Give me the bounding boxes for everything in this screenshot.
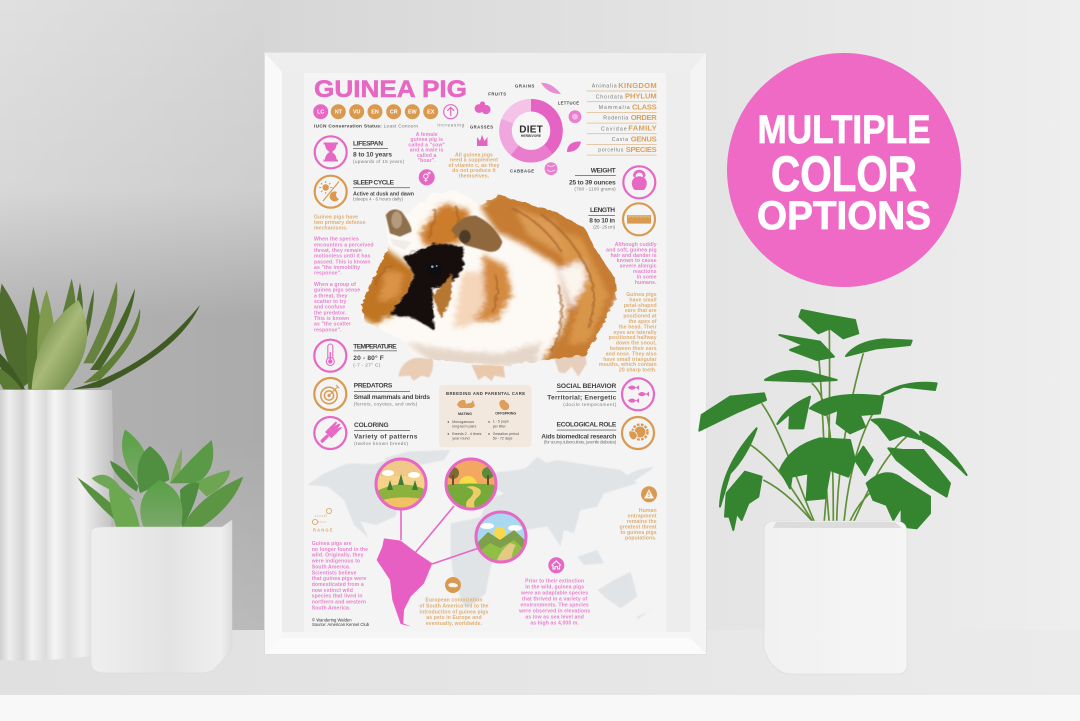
population trend: Increasing	[437, 123, 465, 129]
allergy text: in some	[637, 274, 657, 280]
callout: multiple color options: COLOR	[771, 146, 917, 202]
conservation status badges: LC	[317, 110, 324, 116]
length	[588, 203, 655, 235]
social behavior: (docile temperament)	[563, 402, 617, 407]
conservation status text: IUCN Conservation Status: Least Concern	[314, 123, 418, 129]
breeding panel: Monogamous	[452, 420, 474, 424]
social behavior	[547, 378, 654, 410]
callout: multiple color options	[727, 53, 961, 287]
sleep cycle: SLEEP CYCLE	[353, 180, 395, 187]
feet	[398, 351, 587, 381]
icon: home	[548, 557, 564, 573]
gender note: ⚥	[422, 172, 431, 184]
gender note: guinea pig is	[410, 137, 443, 143]
breeding panel: MATING	[458, 412, 472, 416]
taxonomy table: ORDER	[631, 113, 657, 122]
gender note: A female	[416, 132, 438, 138]
anatomy text: petal-shaped	[624, 303, 657, 309]
extinction text: that thrived in a variety of	[522, 597, 588, 603]
conservation status badges: EN	[371, 110, 379, 116]
taxonomy table: CLASS	[632, 102, 657, 111]
predators: (ferrets, coyotes, and owls)	[354, 402, 418, 407]
temperature: (-7 - 27° C)	[353, 362, 381, 367]
credits: © Wandering Walden	[312, 617, 352, 622]
allergy text: severe allergic	[619, 264, 657, 270]
gender note: and a male is	[410, 148, 444, 154]
icon: lettuce	[569, 110, 581, 123]
breeding panel: BREEDING AND PARENTAL CARE	[446, 391, 525, 396]
anatomy text: between their ears	[610, 346, 657, 352]
lifespan: (upwards of 15 years)	[353, 159, 404, 164]
range text: northern and western	[312, 600, 366, 606]
taxonomy table: FAMILY	[628, 124, 657, 133]
icon: warning	[641, 486, 657, 502]
conservation status badges: VU	[353, 110, 361, 116]
diet labels: CABBAGE	[510, 169, 534, 174]
habitat scene: forest hills	[375, 458, 427, 510]
weight: WEIGHT	[591, 167, 616, 174]
defense text: guinea pigs sense	[314, 288, 360, 294]
taxonomy table: GENUS	[631, 134, 657, 143]
ecological role	[541, 417, 654, 449]
defense text: response".	[314, 271, 342, 277]
square white pot	[764, 521, 907, 674]
icon: offspring	[499, 400, 509, 410]
range text: no longer found in the	[312, 547, 368, 553]
credits: Source: American Kennel Club	[312, 622, 370, 627]
taxonomy table: Rodentia	[603, 116, 628, 122]
square pot with succulent	[77, 429, 243, 673]
threat text: remains the	[627, 519, 657, 525]
social behavior: Territorial; Energetic	[547, 394, 617, 401]
breeding panel: per litter	[493, 424, 506, 428]
length: (25 - 25 cm)	[593, 224, 615, 229]
taxonomy table: KINGDOM	[618, 81, 657, 90]
diet labels: LETTUCE	[558, 100, 579, 105]
length: LENGTH	[590, 207, 615, 214]
range text: species that lived in	[312, 594, 363, 600]
extinction text: as high as 4,000 m.	[530, 621, 580, 627]
allergy text: hair and dander is	[611, 253, 657, 259]
range legend	[312, 508, 333, 533]
taxonomy table: Cavidae	[601, 126, 627, 132]
diet donut chart	[499, 99, 563, 162]
ecological role: Aids biomedical research	[541, 434, 616, 441]
conservation status badges	[313, 104, 458, 119]
sleep cycle: Active at dusk and dawn	[353, 191, 414, 197]
taxonomy table: SPECIES	[626, 145, 657, 154]
extinction text: environments. The species	[520, 603, 589, 609]
taxonomy table: porcellus	[598, 148, 624, 154]
conservation status badges: CR	[390, 110, 398, 116]
range text: South America.	[312, 564, 351, 570]
defense text: as "the immobility	[314, 265, 360, 271]
taxonomy table	[587, 81, 657, 156]
temperature: TEMPERATURE	[353, 343, 397, 350]
colonization text: European colonization	[425, 598, 483, 604]
defense text: motionless until it has	[314, 254, 371, 260]
conservation status badges: EW	[408, 110, 418, 116]
diet labels	[470, 83, 579, 174]
diet labels: GRAINS	[515, 83, 535, 88]
diet donut chart: DIET	[519, 125, 543, 136]
threat text: populations.	[625, 536, 657, 542]
map connector lines	[401, 506, 479, 564]
vitamin note: need a supplement	[450, 158, 498, 164]
lifespan: 8 to 10 years	[353, 152, 392, 159]
allergy text: humans.	[635, 280, 657, 286]
threat text: greatest threat	[620, 524, 657, 530]
social behavior: SOCIAL BEHAVIOR	[557, 383, 617, 390]
extinction text: Prior to their extinction	[525, 579, 584, 585]
defense text: When the species	[314, 237, 359, 243]
callout: multiple color options: MULTIPLE	[758, 108, 930, 152]
allergy text: reactions	[633, 269, 657, 275]
colonization text: as pets in Europe and	[426, 615, 482, 621]
range text: Guinea pigs are	[312, 541, 352, 547]
anatomy text: 20 sharp teeth.	[619, 368, 657, 374]
taxonomy table: Mammalia	[599, 105, 630, 111]
range text: wild. Originally, they	[311, 553, 364, 559]
breeding panel: year round	[452, 437, 469, 441]
anatomy text: positioned at	[623, 314, 657, 320]
vitamin note: All guinea pigs	[455, 152, 493, 158]
defense text: encounters a perceived	[314, 242, 374, 248]
breeding panel: Breeds 2 - 4 times	[452, 432, 482, 436]
defense text: This is known	[314, 316, 349, 322]
diet labels: GRASSES	[470, 125, 493, 130]
defense text: a threat, they	[314, 293, 347, 299]
habitat scene: winding path	[445, 458, 497, 512]
icon: grains	[541, 83, 561, 94]
defense text: passed. This is known	[314, 259, 371, 265]
threat text: to guinea pigs	[620, 530, 657, 536]
taxonomy table: PHYLUM	[625, 92, 657, 101]
gender note	[408, 132, 445, 185]
coloring: (twelve known breeds)	[354, 441, 408, 446]
icon: colonization	[445, 577, 461, 593]
diet labels: FRUITS	[488, 92, 506, 97]
breeding panel	[439, 385, 532, 447]
tall fluted vase with plant	[0, 278, 200, 660]
defense text: Guinea pigs have	[314, 214, 358, 220]
breeding panel: long-term pairs	[452, 424, 476, 428]
fur body	[355, 190, 622, 367]
icon: leaf	[567, 141, 581, 152]
colonization text: eventually, worldwide.	[426, 621, 483, 627]
icon: mating	[457, 400, 475, 408]
frame	[264, 52, 707, 655]
title: GUINEA PIG	[314, 76, 467, 103]
vitamin note: do not produce it	[452, 168, 496, 174]
defense text: the predator.	[314, 310, 347, 316]
temperature	[314, 340, 397, 372]
range text: were indigenous to	[311, 559, 360, 565]
threat text: entrapment	[628, 514, 657, 520]
extinction text: were observed in elevations	[518, 609, 590, 615]
allergy text: Although cuddly	[615, 242, 657, 248]
allergy text: and soft, guinea pig	[606, 247, 657, 253]
breeding panel: 59 - 72 days	[493, 436, 513, 440]
colonization text: of South America led to the	[419, 604, 489, 610]
monstera plant	[699, 310, 967, 530]
extinction text: in the wild, guinea pigs	[525, 585, 584, 591]
defense text: When a group of	[314, 282, 356, 288]
predators: PREDATORS	[354, 383, 393, 390]
temperature: 20 - 80° F	[353, 354, 384, 362]
ecological role: (for scurvy, tuberculosis, juvenile diabetes)	[544, 439, 617, 444]
threat text: Human	[639, 508, 657, 514]
anatomy text: mouths, which contain	[599, 362, 657, 368]
range text: that guinea pigs were	[312, 576, 366, 582]
coloring: COLORING	[354, 422, 389, 429]
defense text: scatter to try	[314, 299, 347, 305]
breeding panel: Gestation period	[493, 432, 519, 436]
predators	[314, 378, 430, 410]
range text: domesticated from a	[312, 582, 364, 588]
gender note: called a "sow"	[408, 142, 445, 148]
range text: South America.	[312, 605, 351, 611]
vitamin note: of vitamin c, as they	[448, 163, 500, 169]
icon: grasses	[477, 135, 488, 146]
conservation status badges: NT	[335, 110, 343, 116]
anatomy text: ears that are	[625, 308, 657, 314]
range text: Scientists believe	[312, 570, 357, 576]
anatomy text: and nose. They also	[606, 351, 657, 357]
eye	[427, 262, 441, 276]
anatomy text: have small	[629, 297, 657, 303]
coloring: Variety of patterns	[354, 433, 418, 440]
taxonomy table: Cavia	[612, 137, 628, 143]
taxonomy table: Animalia	[592, 84, 617, 90]
breeding panel: OFFSPRING	[495, 412, 516, 416]
weight: (700 - 1100 grams)	[574, 187, 616, 192]
ecological role: ECOLOGICAL ROLE	[557, 422, 617, 429]
anatomy text: the apex of	[628, 319, 657, 325]
predators: Small mammals and birds	[354, 394, 430, 401]
ears	[451, 216, 502, 252]
conservation status badges: EX	[427, 110, 435, 116]
lifespan: LIFESPAN	[353, 141, 383, 148]
diet donut chart: HERBIVORE	[521, 134, 542, 138]
icon: fruits	[475, 101, 491, 114]
gender note: "boar".	[418, 158, 436, 164]
extinction text: as low as sea level and	[525, 615, 584, 621]
poster	[304, 73, 666, 632]
world map	[307, 450, 654, 620]
defense text: mechanisms.	[314, 226, 348, 232]
defense text: as "the scatter	[314, 322, 351, 328]
defense text: response".	[314, 327, 342, 333]
coloring	[314, 417, 418, 449]
anatomy text: Guinea pigs	[626, 292, 657, 298]
callout: multiple color options: OPTIONS	[757, 194, 931, 238]
breeding panel: 1 - 5 pups	[493, 420, 509, 424]
gender note: called a	[417, 153, 437, 159]
defense text: threat, they remain	[314, 248, 362, 254]
allergy text: known to cause	[617, 258, 657, 264]
lifespan	[315, 136, 404, 168]
extinction text: were an adaptable species	[520, 591, 588, 597]
defense text: two primary defense	[314, 220, 366, 226]
range legend: RANGE	[313, 528, 333, 533]
defense text	[314, 214, 374, 333]
anatomy text: the head. Their	[619, 324, 657, 330]
anatomy text: positioned halfway	[609, 335, 657, 341]
vitamin note: themselves.	[459, 173, 490, 179]
icon: cabbage	[545, 162, 557, 175]
defense text: and confuse	[314, 305, 345, 311]
weight	[569, 166, 655, 198]
sleep cycle: (sleeps 4 - 6 hours daily)	[353, 197, 403, 202]
South America range	[377, 538, 432, 627]
length: 8 to 10 in	[589, 218, 615, 225]
anatomy text: have small triangular	[603, 357, 657, 363]
colonization text: introduction of guinea pigs	[420, 609, 488, 615]
range text: now extinct wild	[312, 588, 353, 594]
weight: 25 to 39 ounces	[569, 180, 616, 187]
guinea pig illustration	[355, 190, 622, 381]
habitat scene: mountain valley	[475, 511, 527, 565]
sleep cycle	[315, 176, 414, 208]
anatomy text: eyes are laterally	[613, 330, 657, 336]
anatomy text: down the snout,	[616, 341, 657, 347]
taxonomy table: Chordata	[596, 94, 623, 100]
